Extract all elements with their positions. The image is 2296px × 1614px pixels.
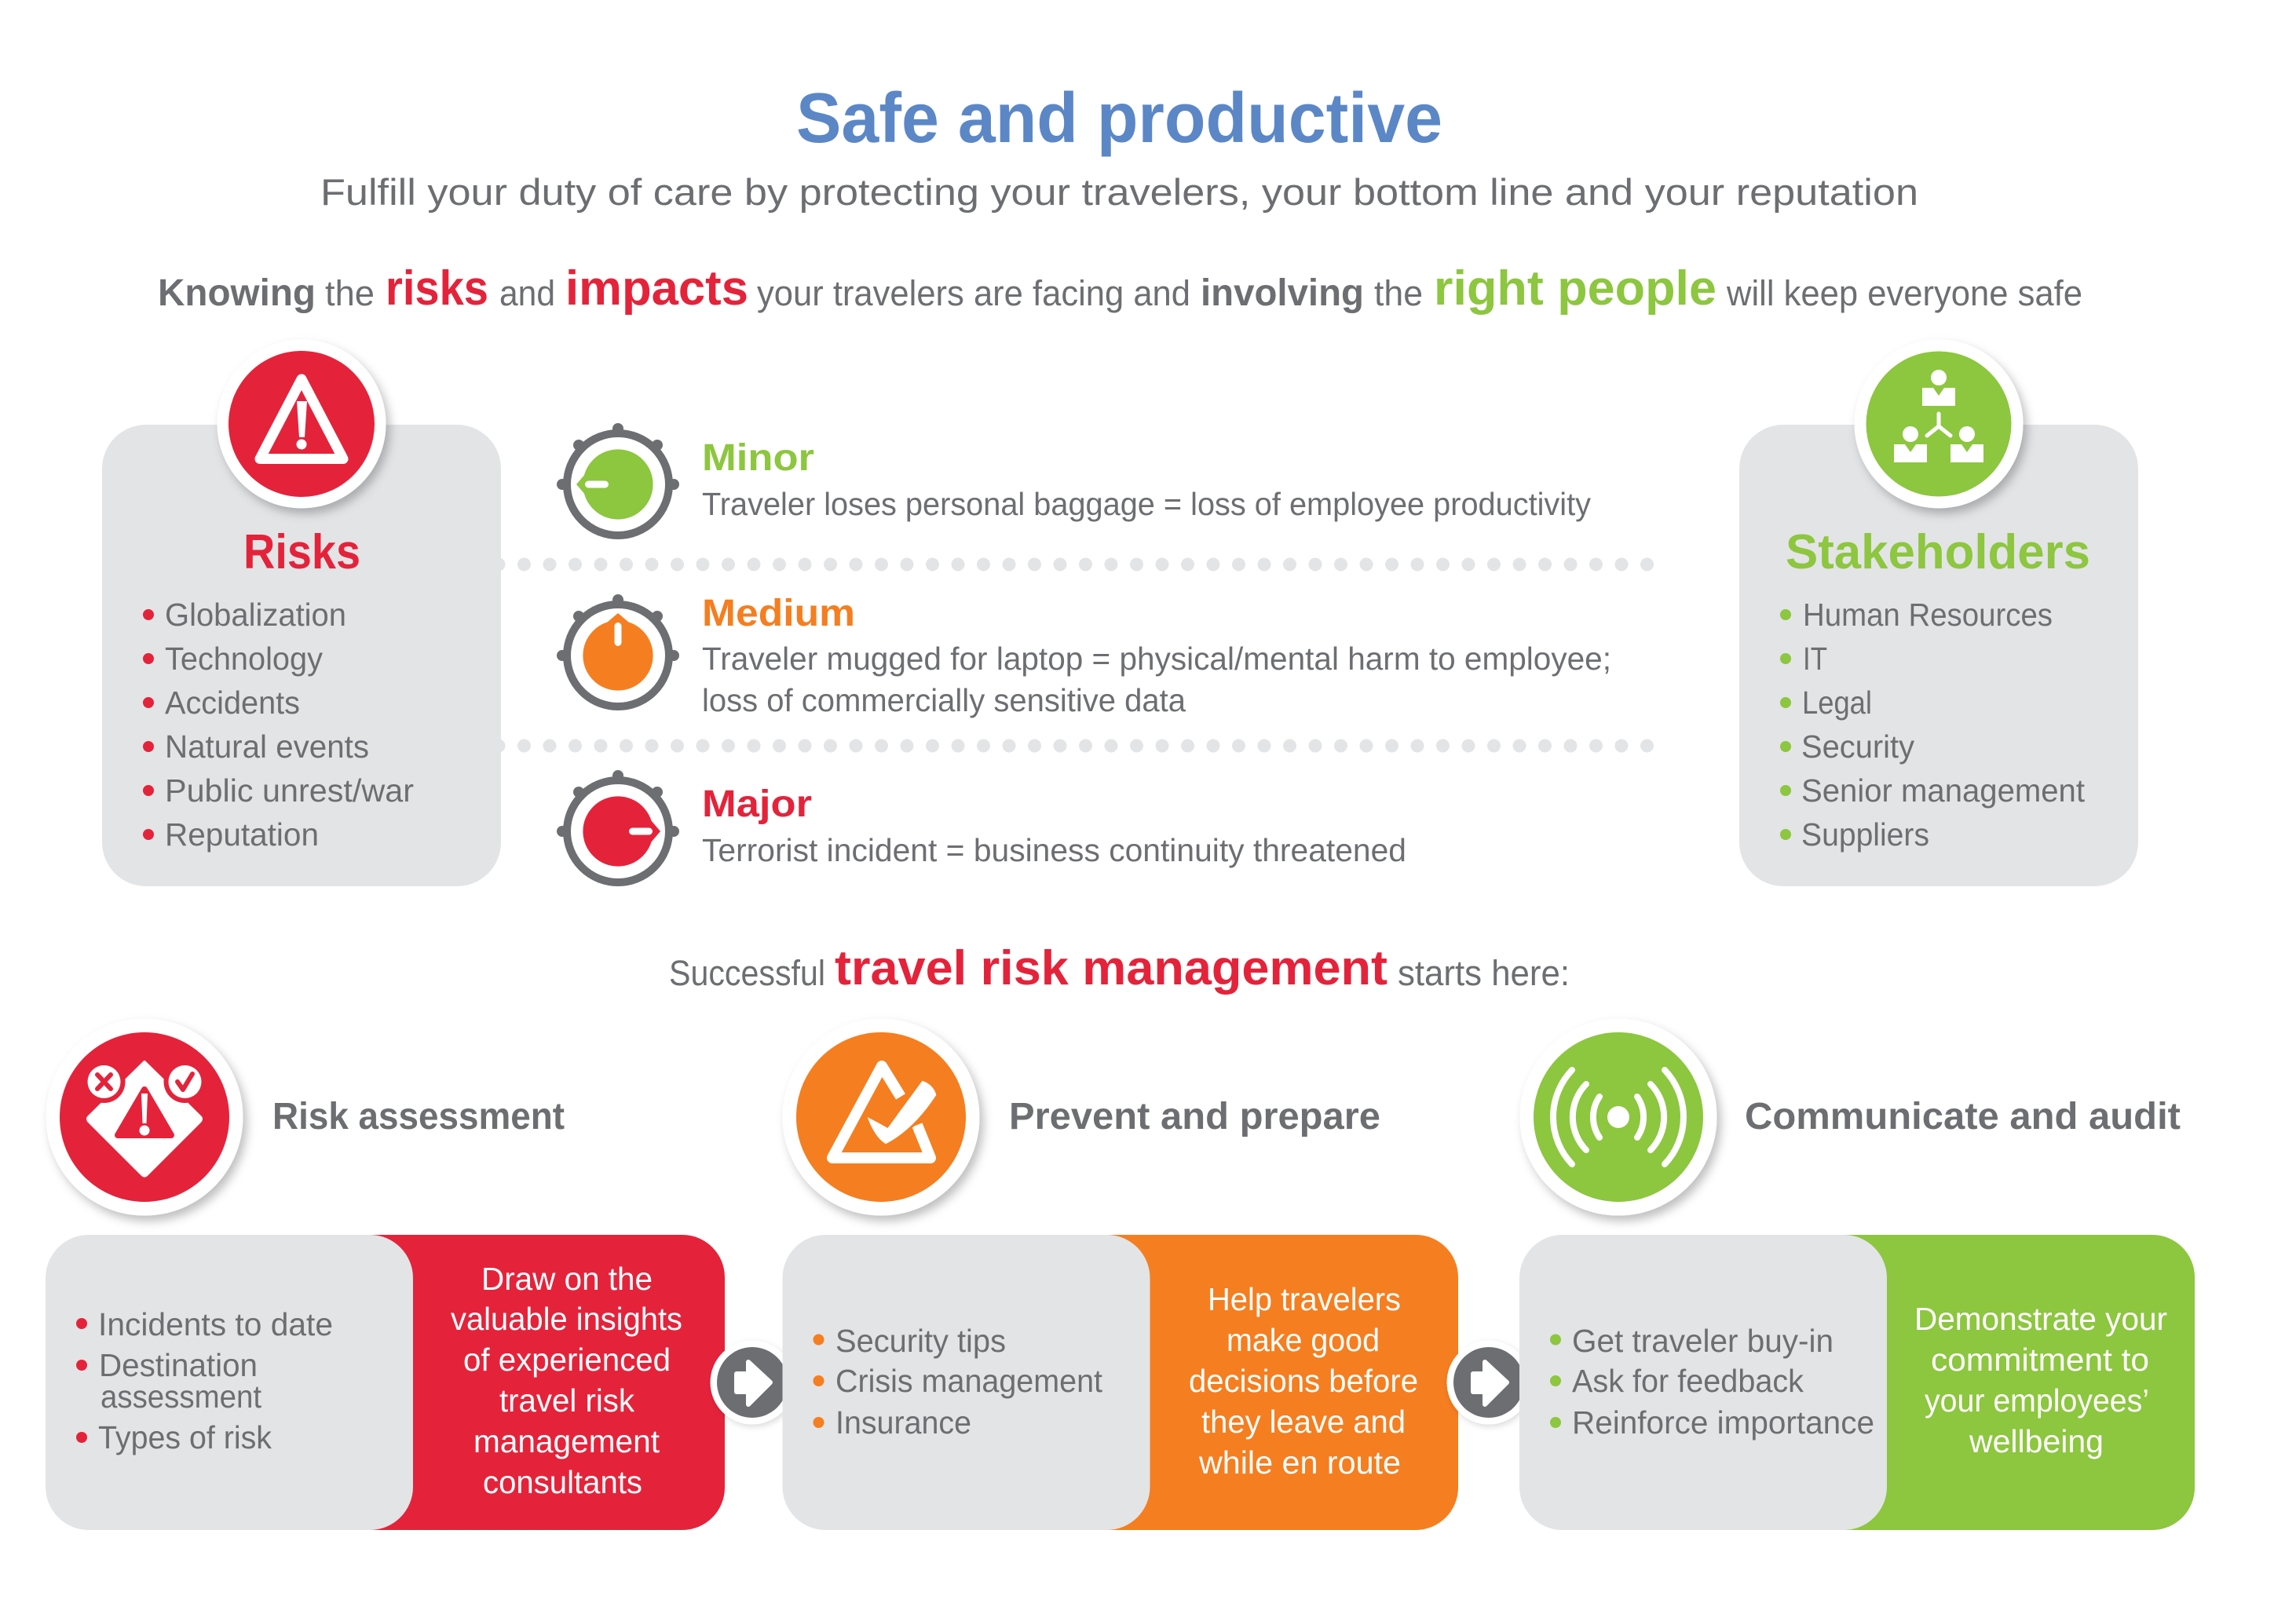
text: prevent and prepare message: they leave and bbox=[1201, 1404, 1406, 1440]
text: risk assessment message: consultants bbox=[483, 1464, 642, 1500]
text: minor example: Traveler loses personal baggage = loss of employee productivity bbox=[702, 486, 1591, 522]
arrow: step 2 to step 3 bbox=[1446, 1341, 1531, 1424]
intro sentence: Knowing bbox=[158, 272, 316, 314]
intro sentence: the bbox=[325, 273, 375, 313]
row: minor impact bbox=[557, 423, 1591, 535]
list: risk assessment: Destination bbox=[99, 1347, 258, 1383]
row: major impact bbox=[557, 770, 1406, 882]
text: medium example: loss of commercially sensitive data bbox=[702, 682, 1186, 718]
text: major example: Terrorist incident = business continuity threatened bbox=[702, 832, 1406, 868]
text: risk assessment message: valuable insights bbox=[451, 1301, 682, 1337]
list: stakeholders: Legal bbox=[1802, 685, 1872, 721]
icon: minor dial bbox=[557, 423, 679, 535]
panel: risks bbox=[102, 339, 501, 886]
icon: risk diamond bbox=[46, 1019, 243, 1215]
text: prevent and prepare message: decisions before bbox=[1189, 1363, 1418, 1399]
step 3: communicate and audit bbox=[1519, 1019, 2195, 1530]
text: risk assessment message bbox=[451, 1261, 682, 1500]
list: prevent and prepare: Security tips bbox=[835, 1323, 1006, 1359]
panel: stakeholders bbox=[1739, 339, 2138, 886]
card: risk assessment bbox=[46, 1235, 725, 1530]
intro sentence: involving bbox=[1201, 272, 1364, 314]
section heading: travel risk management: Successful bbox=[669, 953, 825, 993]
list: risks: Reputation bbox=[165, 816, 319, 853]
card: communicate and audit bbox=[1519, 1235, 2195, 1530]
text: prevent and prepare message: make good bbox=[1227, 1322, 1380, 1358]
heading: risk assessment: Risk assessment bbox=[272, 1096, 565, 1137]
list: stakeholders: IT bbox=[1803, 641, 1827, 677]
text: medium example: Traveler mugged for laptop = physical/mental harm to employee; bbox=[702, 641, 1611, 677]
arrow: step 1 to step 2 bbox=[710, 1341, 795, 1424]
list: risk assessment: Types of risk bbox=[98, 1419, 272, 1455]
list: communicate and audit bbox=[1550, 1323, 1874, 1441]
list: risks: Globalization bbox=[165, 597, 346, 633]
icon: triangle with check bbox=[782, 1019, 980, 1215]
list: risks: Natural events bbox=[165, 728, 369, 765]
intro sentence: risks bbox=[386, 261, 488, 316]
list: risks bbox=[143, 597, 414, 853]
heading: stakeholders: Stakeholders bbox=[1786, 525, 2090, 579]
intro sentence bbox=[158, 261, 2082, 316]
list: risks: Public unrest/war bbox=[165, 772, 414, 809]
step 1: risk assessment bbox=[46, 1019, 725, 1530]
icon: major dial bbox=[557, 770, 679, 882]
list: risk assessment bbox=[76, 1306, 333, 1455]
heading: medium: Medium bbox=[702, 593, 855, 634]
subtitle: Fulfill your duty of care by protecting your travelers, your bottom line and your reputation bbox=[320, 171, 1918, 213]
section heading: travel risk management bbox=[669, 941, 1570, 995]
list: prevent and prepare: Insurance bbox=[835, 1404, 971, 1441]
intro sentence: and bbox=[499, 273, 555, 313]
heading: risks: Risks bbox=[243, 525, 360, 579]
icon: broadcast waves bbox=[1520, 1019, 1717, 1215]
intro sentence: will keep everyone safe bbox=[1726, 273, 2082, 313]
icon: medium dial bbox=[557, 594, 679, 707]
list: stakeholders: Senior management bbox=[1801, 772, 2086, 809]
list: communicate and audit: Reinforce importance bbox=[1572, 1404, 1874, 1441]
list: communicate and audit: Ask for feedback bbox=[1572, 1363, 1804, 1399]
section heading: travel risk management: starts here: bbox=[1398, 953, 1570, 993]
intro sentence: impacts bbox=[565, 261, 748, 316]
text: risk assessment message: management bbox=[473, 1423, 660, 1459]
text: prevent and prepare message bbox=[1189, 1281, 1418, 1481]
text: communicate and audit message: your employees’ bbox=[1925, 1382, 2149, 1419]
text: risk assessment message: travel risk bbox=[499, 1382, 634, 1419]
card: prevent and prepare bbox=[782, 1235, 1458, 1530]
text: communicate and audit message: wellbeing bbox=[1969, 1423, 2104, 1459]
list: risks: Accidents bbox=[165, 685, 300, 721]
text: risk assessment message: of experienced bbox=[463, 1342, 671, 1378]
list: communicate and audit: Get traveler buy-in bbox=[1572, 1323, 1834, 1359]
list: risk assessment: assessment bbox=[101, 1378, 262, 1415]
text: risk assessment message: Draw on the bbox=[481, 1261, 653, 1297]
intro sentence: your travelers are facing and bbox=[757, 273, 1190, 313]
heading: major: Major bbox=[702, 783, 812, 825]
list: stakeholders: Security bbox=[1801, 728, 1914, 765]
row: medium impact bbox=[557, 593, 1611, 718]
list: stakeholders bbox=[1780, 597, 2086, 853]
icon: people network bbox=[1855, 339, 2023, 509]
list: stakeholders: Suppliers bbox=[1801, 816, 1929, 853]
list: risks: Technology bbox=[165, 641, 323, 677]
text: medium example bbox=[702, 641, 1611, 718]
intro sentence: right people bbox=[1434, 261, 1717, 316]
icon: warning triangle bbox=[217, 339, 386, 509]
heading: prevent and prepare: Prevent and prepare bbox=[1009, 1096, 1380, 1137]
list: risk assessment: Incidents to date bbox=[98, 1306, 333, 1342]
text: communicate and audit message: commitment to bbox=[1931, 1342, 2149, 1378]
text: communicate and audit message bbox=[1914, 1301, 2167, 1459]
step 2: prevent and prepare bbox=[782, 1019, 1458, 1530]
heading: minor: Minor bbox=[702, 437, 814, 479]
text: prevent and prepare message: Help travelers bbox=[1208, 1281, 1401, 1317]
list: prevent and prepare: Crisis management bbox=[835, 1363, 1103, 1399]
section heading: travel risk management: travel risk management bbox=[835, 941, 1387, 995]
list: prevent and prepare bbox=[813, 1323, 1103, 1441]
text: prevent and prepare message: while en route bbox=[1198, 1444, 1401, 1481]
text: communicate and audit message: Demonstrate your bbox=[1914, 1301, 2167, 1337]
list: stakeholders: Human Resources bbox=[1803, 597, 2053, 633]
intro sentence: the bbox=[1374, 273, 1423, 313]
title: Safe and productive bbox=[796, 79, 1442, 158]
heading: communicate and audit: Communicate and audit bbox=[1745, 1096, 2181, 1137]
